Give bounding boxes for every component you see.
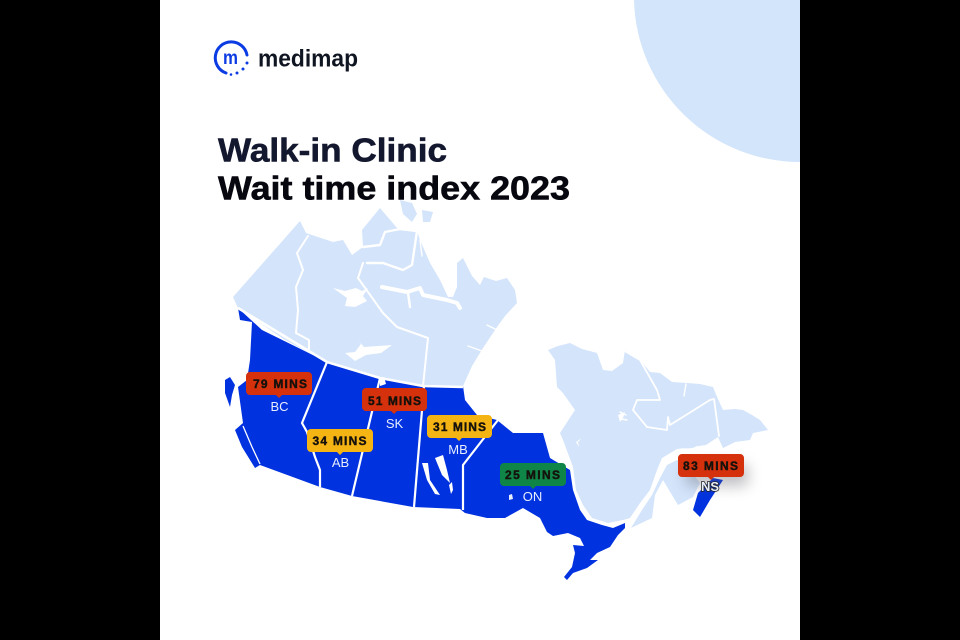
map of Canada	[225, 200, 768, 580]
icon: medimap ring	[215, 42, 248, 76]
northern territories	[233, 200, 517, 386]
title: Wait time index 2023	[218, 170, 570, 206]
callout: SK 51 mins: SK	[386, 416, 403, 431]
panel: white page on black background	[160, 0, 800, 640]
callout: BC 79 mins: BC	[270, 399, 289, 414]
callout: NS 83 mins	[678, 454, 748, 494]
wordmark: medimap	[258, 46, 358, 72]
province borders	[238, 308, 498, 510]
Anticosti island	[676, 444, 696, 448]
Vancouver Island strait	[243, 426, 260, 464]
callout: BC 79 mins: 79 MINS	[253, 377, 307, 391]
decorative circle top right	[634, 0, 800, 162]
icon: medimap ring: m	[223, 48, 238, 69]
callout: NS 83 mins: NS	[701, 479, 719, 494]
logo: medimap	[215, 42, 358, 76]
Maritimes	[631, 460, 700, 528]
callout: MB 31 mins: MB	[448, 442, 468, 457]
callout: NS 83 mins: 83 MINS	[683, 459, 738, 473]
callout: MB 31 mins	[427, 415, 492, 457]
Nova Scotia	[693, 478, 723, 517]
Haida Gwaii	[225, 377, 235, 407]
callout: ON 25 mins: ON	[523, 489, 542, 504]
highlighted provinces: BC AB SK MB ON	[235, 308, 625, 580]
callout: BC 79 mins	[246, 372, 312, 414]
callout: AB 34 mins: 34 MINS	[312, 434, 366, 448]
callout: AB 34 mins	[307, 429, 373, 470]
callout: ON 25 mins	[500, 463, 566, 504]
callout: AB 34 mins: AB	[332, 455, 349, 470]
Manitoba lakes and coast details	[380, 377, 453, 495]
white channels, lakes and territorial borders	[296, 229, 719, 436]
title	[218, 132, 570, 206]
callout: SK 51 mins	[362, 388, 427, 431]
title: Walk-in Clinic	[218, 132, 447, 168]
callout: MB 31 mins: 31 MINS	[433, 420, 486, 434]
Quebec and Labrador	[548, 343, 768, 523]
callout: ON 25 mins: 25 MINS	[505, 468, 560, 482]
callout: SK 51 mins: 51 MINS	[368, 394, 421, 408]
